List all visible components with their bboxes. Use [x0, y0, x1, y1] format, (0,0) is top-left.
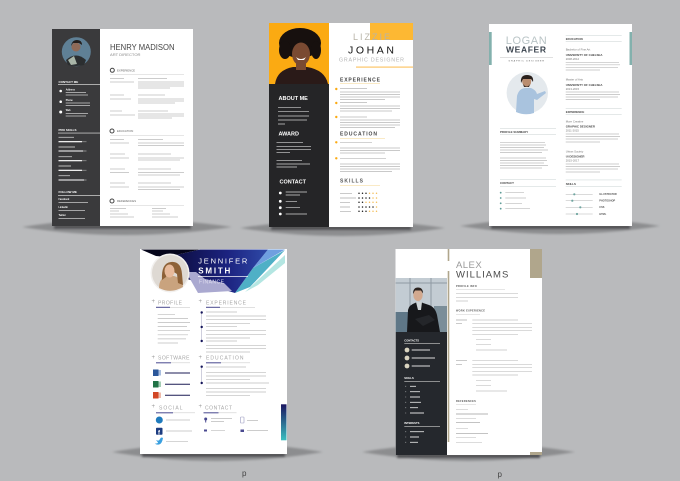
social section	[152, 404, 195, 445]
education: 2013-2015	[566, 87, 580, 91]
sidebar interests: INTERESTS	[404, 421, 420, 425]
sidebar contact: Address	[66, 88, 76, 92]
resume 1: Henry Madison	[52, 29, 193, 226]
profile summary: PROFILE SUMMARY	[500, 130, 528, 134]
sidebar follow me: Facebook	[58, 199, 70, 201]
header: geometric banner	[141, 250, 285, 293]
name heading: GRAPHIC DESIGNER	[508, 60, 544, 63]
sidebar about me: ABOUT ME	[278, 96, 308, 102]
profile summary	[500, 128, 556, 168]
skills sliders: PHOTOSHOP	[599, 200, 616, 203]
name heading: JOHAN	[348, 44, 394, 56]
sidebar follow me	[58, 190, 100, 218]
skills sliders: ILLUSTRATOR	[599, 193, 617, 196]
name heading: WILLIAMS	[456, 270, 508, 281]
skills sliders	[566, 180, 622, 216]
gradient side bar	[281, 404, 286, 440]
experience section: EXPERIENCE	[340, 77, 381, 83]
photo: Alex	[396, 278, 447, 332]
education timeline	[198, 355, 269, 395]
experience section: EXPERIENCE	[117, 68, 135, 72]
experience: More Creative	[566, 120, 584, 124]
photo: Jennifer	[150, 254, 190, 292]
stray letter marks: p	[498, 470, 502, 479]
name heading	[339, 32, 413, 68]
social section: +	[152, 404, 156, 410]
name heading: SMITH	[198, 266, 231, 275]
sidebar contact	[279, 180, 307, 215]
sidebar follow me: FOLLOW ME	[58, 190, 77, 194]
experience	[566, 108, 622, 172]
name heading	[198, 257, 248, 285]
name heading: GRAPHIC DESIGNER	[339, 58, 404, 64]
experience: Urban Society	[566, 150, 584, 154]
contact	[500, 179, 556, 210]
work experience	[456, 310, 532, 391]
experience: EXPERIENCE	[566, 110, 584, 114]
resume 4: Jennifer Smith	[140, 249, 287, 454]
skills ratings: SKILLS	[340, 178, 364, 184]
skills ratings	[340, 178, 380, 211]
education	[566, 36, 622, 100]
name heading	[456, 260, 508, 281]
resume 3: Logan Weafer	[489, 24, 632, 226]
contact: CONTACT	[500, 181, 514, 185]
profile info: PROFILE INFO	[456, 285, 477, 288]
sidebar contact: Web	[66, 110, 71, 112]
sidebar contacts	[404, 338, 440, 368]
education: UNIVERSITY OF CHELSEA	[566, 53, 603, 57]
references: REFERENCES	[456, 400, 476, 403]
sidebar: dark panel	[52, 29, 100, 226]
resume 5: Alex Williams	[396, 249, 542, 455]
sidebar award	[276, 132, 311, 167]
name heading: LIZZIE	[353, 32, 390, 42]
references section	[110, 199, 184, 217]
contact section: CONTACT	[205, 406, 232, 412]
education timeline: +	[198, 355, 202, 361]
tan accents	[448, 249, 542, 455]
sidebar contact: CONTACT ME	[58, 80, 78, 84]
shadows under the resumes	[22, 218, 660, 461]
name heading: ART DIRECTOR	[110, 53, 141, 57]
experience: UI DESIGNER	[566, 154, 585, 158]
contact section: +	[198, 404, 202, 410]
education timeline: EDUCATION	[206, 356, 244, 362]
skills sliders: HTML	[599, 213, 607, 216]
social section: f	[158, 430, 161, 436]
sidebar about me	[278, 96, 309, 124]
education section: EDUCATION	[117, 129, 133, 133]
name heading	[500, 35, 553, 63]
experience section	[335, 77, 400, 128]
sidebar contact: CONTACT	[280, 180, 307, 186]
education: UNIVERSITY OF CHELSEA	[566, 83, 603, 87]
education: Master of Arts	[566, 78, 584, 82]
name heading	[110, 43, 175, 57]
profile section: PROFILE	[158, 301, 183, 307]
experience: 2011-2015	[566, 128, 579, 132]
sidebar award: AWARD	[278, 132, 299, 138]
name heading: FINANCE	[199, 279, 225, 285]
contact section	[198, 404, 268, 432]
sidebar contact: Phone	[66, 100, 73, 102]
experience timeline: +	[198, 299, 202, 305]
skills sliders: CSS	[599, 206, 605, 209]
experience timeline: EXPERIENCE	[206, 301, 247, 307]
sidebar pro skills	[58, 128, 100, 180]
sidebar contacts: CONTACTS	[404, 338, 419, 342]
software section: SOFTWARE	[158, 356, 190, 362]
photo: Logan	[507, 72, 548, 114]
experience: 2015-2017	[566, 158, 580, 162]
sidebar skills: SKILLS	[404, 376, 414, 380]
references	[456, 400, 488, 442]
sidebar follow me: Twitter	[58, 214, 66, 217]
education section: EDUCATION	[340, 132, 377, 138]
sidebar contact	[58, 80, 100, 116]
name heading: JENNIFER	[198, 257, 248, 266]
education section	[335, 132, 400, 172]
sidebar pro skills: PRO SKILLS	[58, 128, 77, 132]
sidebar follow me: Linkedin	[58, 207, 69, 209]
name heading: LOGAN	[506, 35, 547, 47]
photo: Henry	[62, 37, 91, 66]
social section: SOCIAL	[159, 406, 183, 412]
stray letter marks	[242, 469, 502, 479]
profile section: +	[152, 299, 156, 305]
education: 2008-2012	[566, 57, 580, 61]
experience timeline	[198, 299, 266, 352]
references section: REFERENCES	[117, 199, 136, 203]
work experience: WORK EXPERIENCE	[456, 310, 485, 313]
sidebar interests	[404, 421, 440, 442]
name heading: HENRY MADISON	[110, 43, 175, 52]
education: EDUCATION	[566, 37, 583, 41]
software section: +	[152, 355, 156, 361]
experience section	[110, 68, 184, 118]
name heading: WEAFER	[506, 45, 546, 55]
photo: Lizzie	[275, 28, 328, 84]
sidebar panel	[396, 332, 447, 455]
profile info	[456, 285, 518, 301]
education: Bachelor of Fine Art	[566, 48, 590, 52]
skills sliders: SKILLS	[566, 182, 576, 186]
profile section	[152, 299, 190, 343]
software section	[152, 355, 190, 398]
experience: GRAPHIC DESIGNER	[566, 124, 596, 128]
sidebar skills	[404, 376, 440, 442]
name heading: ALEX	[456, 260, 482, 271]
education section	[110, 129, 184, 190]
resume 2: Lizzie Johan	[269, 23, 413, 227]
stray letter marks: p	[242, 469, 247, 478]
